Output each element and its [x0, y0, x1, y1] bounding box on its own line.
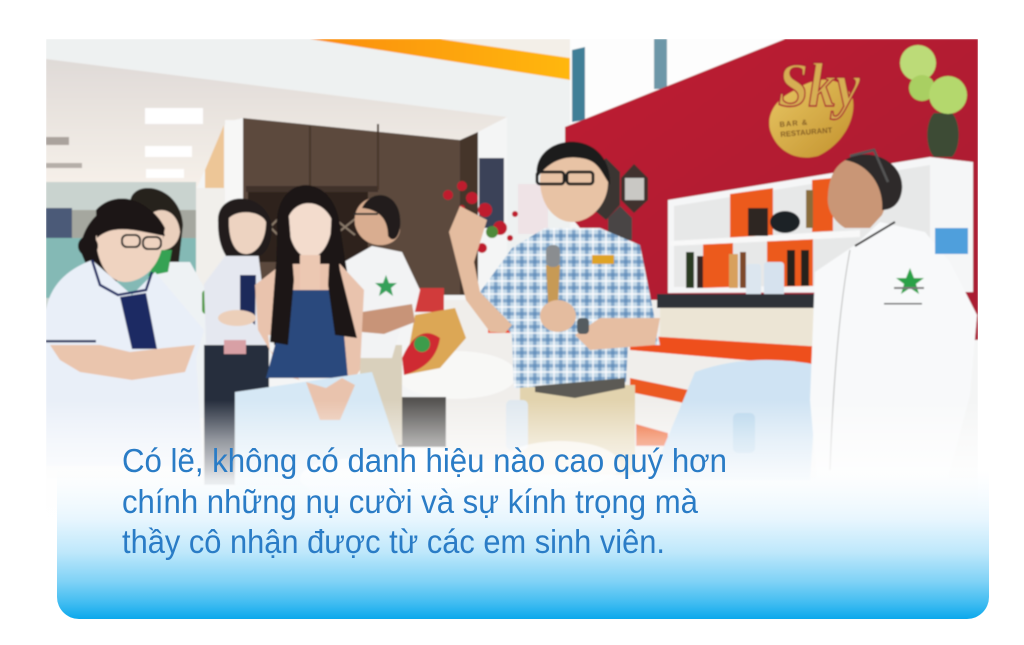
shelf unit — [668, 157, 973, 301]
round table and decoration — [397, 288, 517, 447]
red wall — [565, 39, 978, 340]
clasped hands — [306, 378, 355, 420]
chair back right — [658, 358, 813, 470]
quote text: Có lẽ, không có danh hiệu nào cao quý hơn — [122, 442, 727, 479]
chair back left — [235, 372, 398, 490]
quote text: chính những nụ cười và sự kính trọng mà — [122, 483, 699, 520]
white fade over photo — [46, 400, 989, 542]
windows — [570, 39, 785, 124]
chef in white jacket — [810, 150, 977, 490]
wood cabinet wall — [243, 118, 478, 295]
sky logo: BAR & — [779, 118, 809, 129]
background corridor — [46, 120, 232, 308]
quote text: thầy cô nhận được từ các em sinh viên. — [122, 523, 665, 560]
sky logo — [769, 52, 860, 158]
flower vase — [900, 45, 967, 157]
student behind, green collar — [130, 187, 206, 320]
hexagonal frames — [594, 158, 648, 240]
water bottles — [506, 400, 755, 453]
blue folder on shelf — [935, 228, 968, 254]
red berry branch — [443, 181, 518, 253]
gradient caption panel — [57, 470, 989, 619]
plates on table — [338, 440, 620, 474]
photo: event at Sky Bar and Restaurant — [46, 39, 978, 484]
quote text — [122, 442, 727, 560]
student with glasses in front — [46, 198, 198, 420]
framed picture and poster — [479, 158, 548, 234]
upper wall and ceiling — [46, 39, 571, 189]
sky logo: RESTAURANT — [780, 125, 833, 139]
student in navy tie — [204, 198, 272, 485]
man in polo shirt — [344, 195, 420, 445]
male presenter in plaid shirt — [449, 142, 660, 475]
floor and bar counter — [445, 294, 825, 460]
sky logo: Sky — [778, 52, 860, 120]
long-haired woman in denim dress — [255, 185, 364, 394]
